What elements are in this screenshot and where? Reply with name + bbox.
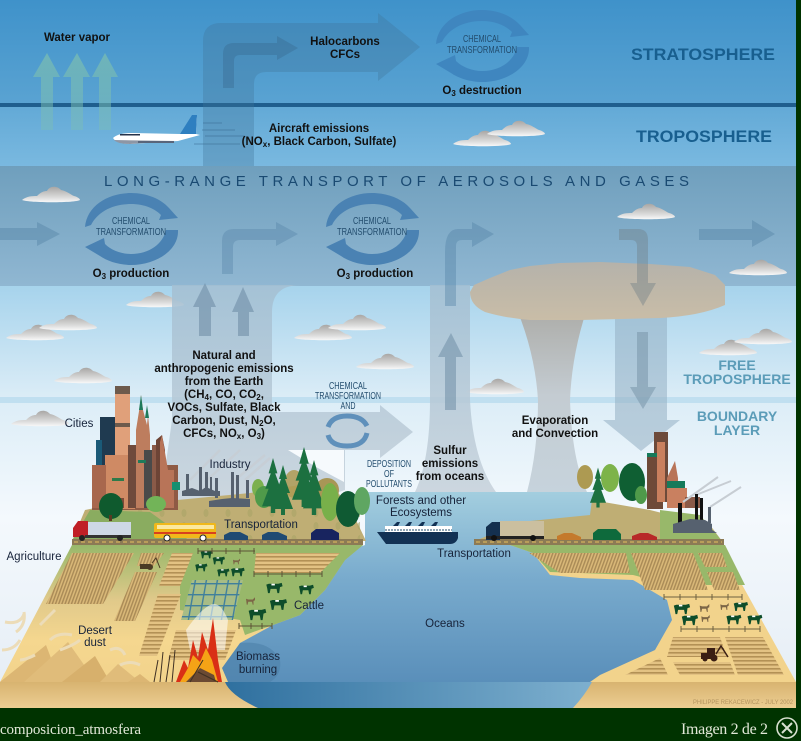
label: sulfur emissions: from oceans — [416, 471, 484, 483]
label: boundary layer: LAYER — [714, 422, 760, 438]
label: natural and anthropogenic emissions: 2 — [256, 393, 261, 402]
fences left — [198, 548, 322, 629]
label: O3 production left: O — [93, 268, 102, 280]
label: sulfur emissions: Sulfur — [433, 445, 467, 457]
label: O3 production left: production — [106, 268, 169, 280]
right trees — [577, 463, 647, 508]
clouds: upper troposphere — [453, 121, 545, 146]
label: natural and anthropogenic emissions: (CH — [184, 389, 205, 401]
chemical transformation cycle: stratosphere — [436, 10, 529, 82]
chemical transformation and deposition: CHEMICAL — [329, 381, 367, 392]
footer filename: composicion_atmosfera — [0, 722, 141, 738]
footer image counter: Imagen 2 de 2 — [681, 721, 768, 738]
heading: long-range transport: LONG-RANGE TRANSPORT OF AEROSOLS AND GASES — [104, 173, 689, 190]
emissions column — [160, 285, 413, 505]
icon: close button — [777, 718, 797, 738]
right border — [796, 0, 801, 708]
chemical transformation cycle: left: CHEMICAL — [112, 216, 150, 227]
mushroom cloud — [470, 262, 725, 320]
left vehicles — [73, 521, 339, 541]
icon: right city — [647, 432, 700, 509]
label: evaporation and convection: Evaporation — [522, 415, 588, 427]
left upper land — [72, 480, 366, 541]
label: cities: Cities — [65, 418, 94, 430]
label: desert dust: dust — [84, 637, 107, 649]
cattle left — [195, 551, 314, 620]
label: biomass burning: Biomass — [236, 651, 280, 663]
label: aircraft emissions: x — [263, 140, 268, 149]
label: O3 destruction: O — [442, 85, 451, 97]
arrow: band right — [699, 220, 775, 247]
label: sulfur emissions: emissions — [422, 458, 478, 470]
label: oceans: Oceans — [425, 618, 465, 630]
ship — [377, 522, 458, 544]
label: natural and anthropogenic emissions: 4 — [205, 393, 210, 402]
emissions arrows — [193, 283, 254, 336]
smoke — [186, 604, 228, 650]
tropopause line — [0, 103, 801, 107]
white gap near deposition arrow — [288, 450, 344, 482]
desert dunes — [0, 642, 150, 682]
label: natural and anthropogenic emissions: VOCs, Sulfate, Black — [167, 402, 281, 414]
label: transportation right: Transportation — [437, 548, 511, 560]
footer bar — [0, 708, 801, 741]
chemical transformation cycle: left — [85, 193, 178, 265]
label: natural and anthropogenic emissions: from the Earth — [185, 376, 263, 388]
icon: airplane — [113, 115, 245, 144]
chemical transformation and deposition: OF — [384, 469, 394, 480]
label: O3 production left: 3 — [102, 272, 107, 281]
chemical transformation cycle: stratosphere: TRANSFORMATION — [447, 45, 517, 56]
fences right — [664, 594, 760, 632]
label: free troposphere: FREE — [718, 357, 756, 373]
chemical transformation cycle: middle: CHEMICAL — [353, 216, 391, 227]
label: aircraft emissions: Aircraft emissions — [269, 123, 369, 135]
label: halocarbons: CFCs — [330, 49, 360, 61]
label: natural and anthropogenic emissions: 2 — [259, 419, 264, 428]
label: natural and anthropogenic emissions: , O — [241, 428, 257, 440]
arrow: sulfur upper bent — [445, 222, 494, 306]
label: halocarbons: Halocarbons — [310, 36, 380, 48]
label: forests and other ecosystems: Forests and other — [376, 495, 466, 507]
left fields — [46, 553, 340, 660]
heading: stratosphere: STRATOSPHERE — [631, 45, 775, 64]
irrigated grid field — [181, 580, 243, 620]
icon: tractor right — [701, 646, 728, 662]
label: O3 production middle: production — [350, 268, 413, 280]
dust swirls — [2, 610, 140, 665]
ocean front face — [225, 682, 595, 708]
icon: city skyline — [92, 386, 180, 510]
label: natural and anthropogenic emissions: CFCs, NO — [183, 428, 237, 440]
chemical transformation and deposition: POLLUTANTS — [366, 479, 412, 490]
label: natural and anthropogenic emissions: ) — [261, 428, 265, 440]
chemical transformation and deposition: TRANSFORMATION — [315, 391, 381, 402]
label: water vapor: Water vapor — [44, 32, 111, 44]
right road — [474, 539, 724, 545]
label: evaporation and convection: and Convection — [512, 428, 598, 440]
arrow: descending column — [603, 285, 680, 451]
label: natural and anthropogenic emissions: 3 — [257, 432, 262, 441]
heading: troposphere: TROPOSPHERE — [636, 127, 772, 146]
arrow: band left — [0, 222, 60, 246]
arrow: mushroom descending bent — [619, 229, 656, 306]
label: natural and anthropogenic emissions: , — [261, 389, 264, 401]
ocean — [220, 492, 680, 682]
right land plane — [510, 545, 796, 682]
convection stem — [513, 300, 590, 492]
credit: PHILIPPE REKACEWICZ - JULY 2002 — [693, 700, 794, 706]
large halocarbon transport arrow — [203, 13, 420, 166]
arrow: sulfur lower — [438, 333, 463, 410]
left road — [72, 539, 363, 545]
label: biomass burning: burning — [239, 664, 277, 676]
left land front face — [0, 682, 258, 708]
label: aircraft emissions: , Black Carbon, Sulfate) — [267, 136, 396, 148]
cattle right — [674, 602, 762, 625]
icon: city trees — [99, 493, 166, 521]
right land front face — [573, 682, 796, 708]
left land plane — [0, 545, 363, 682]
label: natural and anthropogenic emissions: O, — [264, 415, 276, 427]
label: O3 production middle: 3 — [346, 272, 351, 281]
right fields — [529, 553, 784, 675]
label: natural and anthropogenic emissions: x — [237, 432, 242, 441]
right upper land — [475, 500, 722, 541]
chemical transformation cycle: left: TRANSFORMATION — [96, 227, 166, 238]
label: transportation left: Transportation — [224, 519, 298, 531]
label: natural and anthropogenic emissions: Carbon, Dust, N — [172, 415, 259, 427]
chemical transformation cycle: middle: TRANSFORMATION — [337, 227, 407, 238]
label: forests and other ecosystems: Ecosystems — [390, 507, 452, 519]
label: O3 production middle: O — [337, 268, 346, 280]
icon: forest — [252, 447, 370, 527]
label: natural and anthropogenic emissions: , CO, CO — [209, 389, 256, 401]
chemical transformation and deposition — [315, 381, 412, 490]
icon: water vapor arrows — [33, 53, 118, 130]
ocean shadow near biomass — [222, 643, 280, 682]
label: industry: Industry — [210, 459, 251, 471]
label: natural and anthropogenic emissions: anthropogenic emissions — [154, 363, 294, 375]
label: free troposphere: TROPOSPHERE — [683, 371, 791, 387]
sulfur emissions column — [415, 285, 496, 492]
chemical transformation and deposition: DEPOSITION — [367, 459, 411, 470]
label: natural and anthropogenic emissions: Natural and — [192, 350, 256, 362]
clouds: band and free troposphere — [6, 187, 792, 426]
label: aircraft emissions: (NO — [242, 136, 263, 148]
chemical transformation and deposition: AND — [340, 401, 356, 412]
right vehicles — [486, 521, 657, 541]
industry smoke — [190, 450, 270, 482]
label: agriculture: Agriculture — [7, 551, 61, 563]
label: cattle: Cattle — [294, 600, 324, 612]
label: O3 destruction: 3 — [451, 89, 456, 98]
label: O3 destruction: destruction — [456, 85, 522, 97]
right factory and smoke — [673, 477, 741, 533]
icon: tractor left — [140, 558, 160, 570]
label: desert dust: Desert — [78, 625, 112, 637]
icon: factories — [182, 467, 250, 507]
arrow: band middle bent — [222, 222, 298, 274]
chemical transformation cycle: middle — [326, 193, 419, 265]
label: boundary layer: BOUNDARY — [697, 408, 777, 424]
arrow: lower descending — [630, 332, 656, 409]
inner arrow: halocarbons — [223, 36, 298, 88]
chemical transformation cycle: stratosphere: CHEMICAL — [463, 34, 501, 45]
icon: fire — [154, 618, 222, 682]
